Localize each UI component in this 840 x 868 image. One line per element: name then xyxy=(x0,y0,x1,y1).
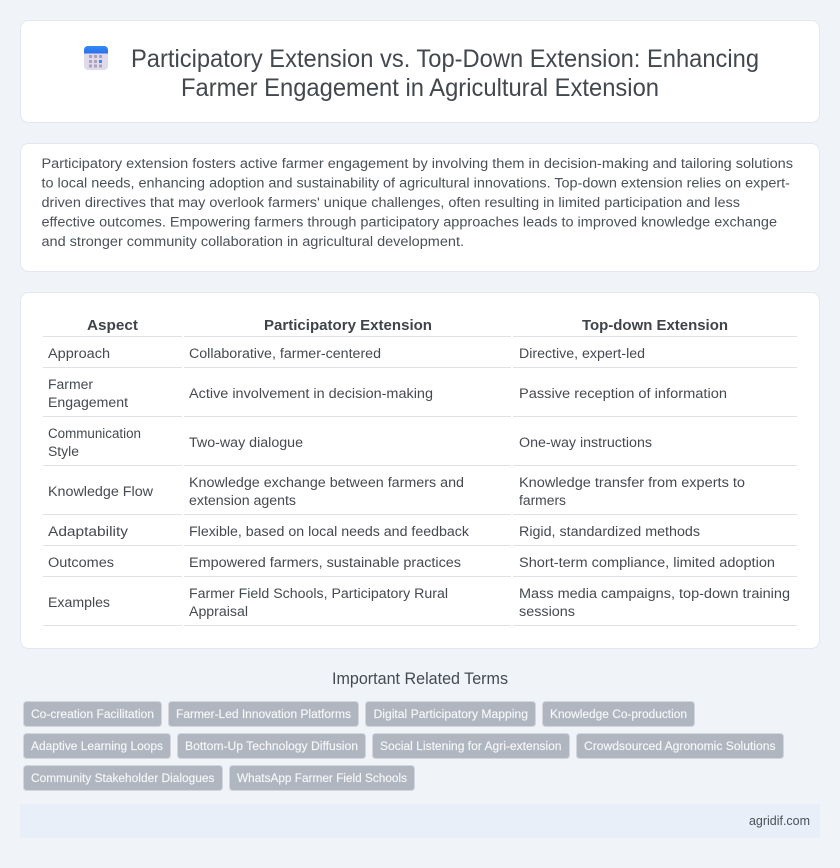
table row: examples xyxy=(48,586,790,620)
text block: intro paragraph: and stronger community collaboration in agricultural development. xyxy=(42,234,464,250)
text block: intro paragraph: to local needs, enhancing adoption and sustainability of agricultural innovations. Top-down extension relies on expert- xyxy=(42,176,790,192)
tag xyxy=(372,734,570,758)
table row: communication style: One-way instructions xyxy=(519,435,652,451)
table row: farmer engagement: Passive reception of information xyxy=(519,386,727,402)
table row: adaptability: Adaptability xyxy=(48,524,129,540)
table row: approach: Directive, expert-led xyxy=(519,346,645,362)
table row: knowledge flow: Knowledge transfer from experts to xyxy=(519,475,745,491)
panel: comparison table card xyxy=(20,292,820,648)
tag xyxy=(542,702,694,726)
tag: WhatsApp Farmer Field Schools xyxy=(237,771,407,785)
table row: farmer engagement xyxy=(48,377,727,411)
table row: examples: sessions xyxy=(519,604,575,620)
tag xyxy=(178,734,366,758)
tag xyxy=(168,702,358,726)
text block: intro paragraph: driven directives that may overlook farmers' unique challenges, often resulting in limited participation and less xyxy=(42,195,740,211)
footer source: agridif.com xyxy=(749,814,810,828)
table header: Participatory Extension xyxy=(264,318,432,334)
tag: Knowledge Co-production xyxy=(550,707,687,721)
table row: approach: Collaborative, farmer-centered xyxy=(189,346,381,362)
tag: Digital Participatory Mapping xyxy=(374,707,528,721)
tag xyxy=(24,734,170,758)
title: Farmer Engagement in Agricultural Extension xyxy=(181,74,659,102)
heading: important related terms: Important Related Terms xyxy=(332,670,508,688)
table row: outcomes: Outcomes xyxy=(48,555,114,571)
table row: approach xyxy=(48,346,645,362)
table row: approach: Approach xyxy=(48,346,110,362)
table row: communication style: Communication xyxy=(48,426,141,442)
table row: farmer engagement: Engagement xyxy=(48,395,128,411)
table row: communication style xyxy=(48,426,652,460)
panel: title card xyxy=(20,20,820,122)
table row: farmer engagement: Active involvement in decision-making xyxy=(189,386,433,402)
table row: communication style: Two-way dialogue xyxy=(189,435,303,451)
table row: knowledge flow: Knowledge Flow xyxy=(48,484,154,500)
text block: intro paragraph: Participatory extension fosters active farmer engagement by involving them in decision-making and tailoring solutions xyxy=(42,156,793,172)
table row: adaptability: Rigid, standardized methods xyxy=(519,524,700,540)
panel: intro text card xyxy=(20,144,820,272)
tag: Adaptive Learning Loops xyxy=(31,739,163,753)
footer bar xyxy=(20,804,820,838)
table header: Top-down Extension xyxy=(582,318,728,334)
table row: knowledge flow: extension agents xyxy=(189,493,296,509)
related term tags xyxy=(24,702,784,790)
table row: adaptability xyxy=(48,524,700,540)
tag xyxy=(24,702,162,726)
tag: Social Listening for Agri-extension xyxy=(380,739,562,753)
table row: examples: Farmer Field Schools, Participatory Rural xyxy=(189,586,448,602)
table row: examples: Appraisal xyxy=(189,604,248,620)
tag: Bottom-Up Technology Diffusion xyxy=(185,739,358,753)
tag xyxy=(24,766,222,790)
title: Participatory Extension vs. Top-Down Extension: Enhancing xyxy=(131,45,759,73)
table row: outcomes: Short-term compliance, limited adoption xyxy=(519,555,775,571)
table row: farmer engagement: Farmer xyxy=(48,377,93,393)
table row: examples: Mass media campaigns, top-down training xyxy=(519,586,790,602)
table row: knowledge flow xyxy=(48,475,745,509)
table row: examples: Examples xyxy=(48,595,110,611)
table row: adaptability: Flexible, based on local needs and feedback xyxy=(189,524,470,540)
table row: outcomes xyxy=(48,555,775,571)
table row: knowledge flow: farmers xyxy=(519,493,566,509)
table header xyxy=(87,318,728,334)
table row: outcomes: Empowered farmers, sustainable practices xyxy=(189,555,461,571)
tag: Co-creation Facilitation xyxy=(31,707,154,721)
tag xyxy=(230,766,414,790)
tag xyxy=(576,734,784,758)
text block: intro paragraph: effective outcomes. Empowering farmers through participatory approaches leads to improved knowledge exchange xyxy=(42,214,777,230)
tag: Farmer-Led Innovation Platforms xyxy=(176,707,351,721)
icon: calendar xyxy=(84,46,108,70)
tag: Crowdsourced Agronomic Solutions xyxy=(584,739,776,753)
tag: Community Stakeholder Dialogues xyxy=(31,771,214,785)
table header: Aspect xyxy=(87,318,138,334)
table row: knowledge flow: Knowledge exchange between farmers and xyxy=(189,475,464,491)
table row: communication style: Style xyxy=(48,444,79,460)
tag xyxy=(366,702,536,726)
